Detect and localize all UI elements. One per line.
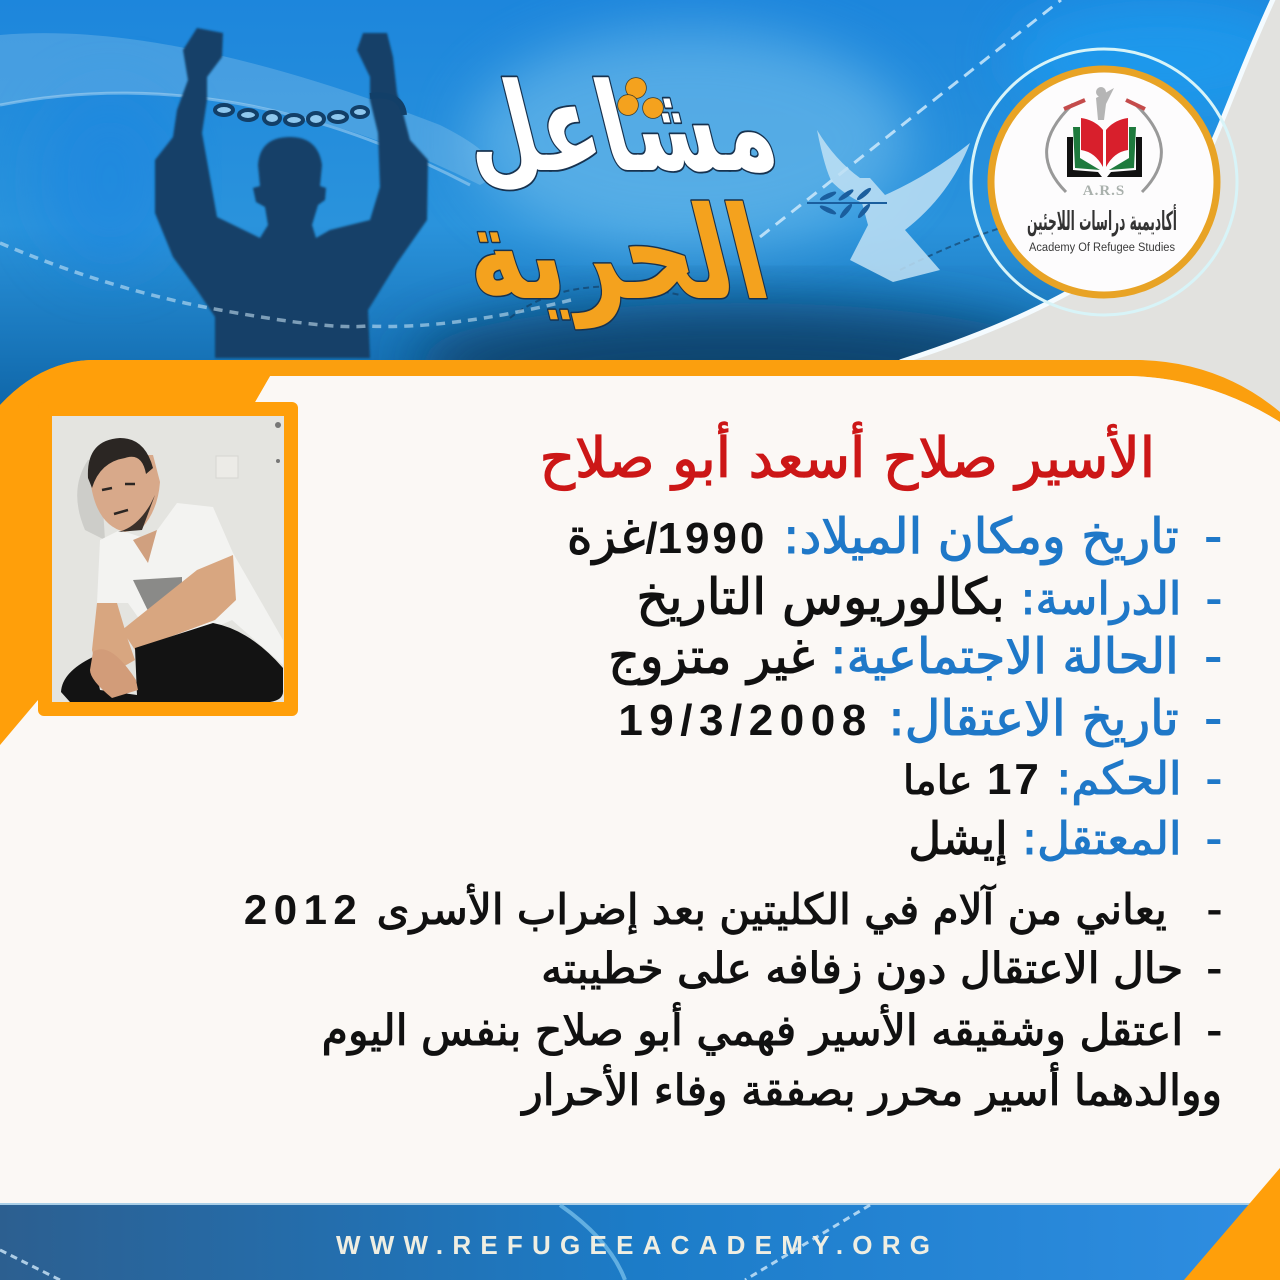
website address: WWW.REFUGEEACADEMY.ORG [336,1230,930,1260]
logo book [1067,118,1142,177]
right arm [122,555,236,650]
marital status line: - الحالة الاجتماعية: غير متزوج [608,628,1222,685]
orange dots [618,78,663,118]
arrest date line: - تاريخ الاعتقال: 19/3/2008 [618,690,1222,747]
calligraphy title [445,58,790,330]
dove [817,130,970,282]
dashed wire [0,243,571,327]
logo [971,49,1237,315]
logo: A.R.S [1083,183,1125,199]
shirt [97,503,283,665]
detail line four: ووالدهما أسير محرر بصفقة وفاء الأحرار [522,1067,1222,1116]
cream panel edge [0,376,1280,1203]
logo arcs [1047,100,1161,192]
left orange block [0,360,270,745]
grey corner panel [906,0,1280,430]
photo of the prisoner [52,416,284,702]
photo frame [38,402,298,716]
orange swoosh [0,360,1280,745]
trousers [61,623,283,702]
logo figure [1096,87,1114,120]
head [90,455,160,532]
prison line: - المعتقل: إيشل [908,812,1222,865]
left arm [92,603,135,680]
sentence line: - الحكم: 17 عاما [903,752,1222,805]
detail line two: - حال الاعتقال دون زفافه على خطيبته [541,945,1222,994]
word: alhurriya: الحرية [445,179,783,330]
prisoner silhouette [155,28,428,358]
olive branch [807,186,887,220]
handcuff chain [215,105,368,125]
footer band [0,1168,1280,1280]
study line: - الدراسة: بكالوريوس التاريخ [636,568,1222,626]
detail line three: - اعتقل وشقيقه الأسير فهمي أبو صلاح بنفس اليوم [322,1007,1222,1056]
detail line one: -يعاني من آلام في الكليتين بعد إضراب الأسرى 2012 [244,885,1222,934]
header banner [0,0,1280,427]
hands [90,649,138,698]
name heading: الأسير صلاح أسعد أبو صلاح [540,426,1155,490]
birth line: - تاريخ ومكان الميلاد: 1990/غزة [567,508,1222,565]
logo: Academy Of Refugee Studies [1029,242,1175,254]
word: mashael: مشاعل [445,58,790,200]
